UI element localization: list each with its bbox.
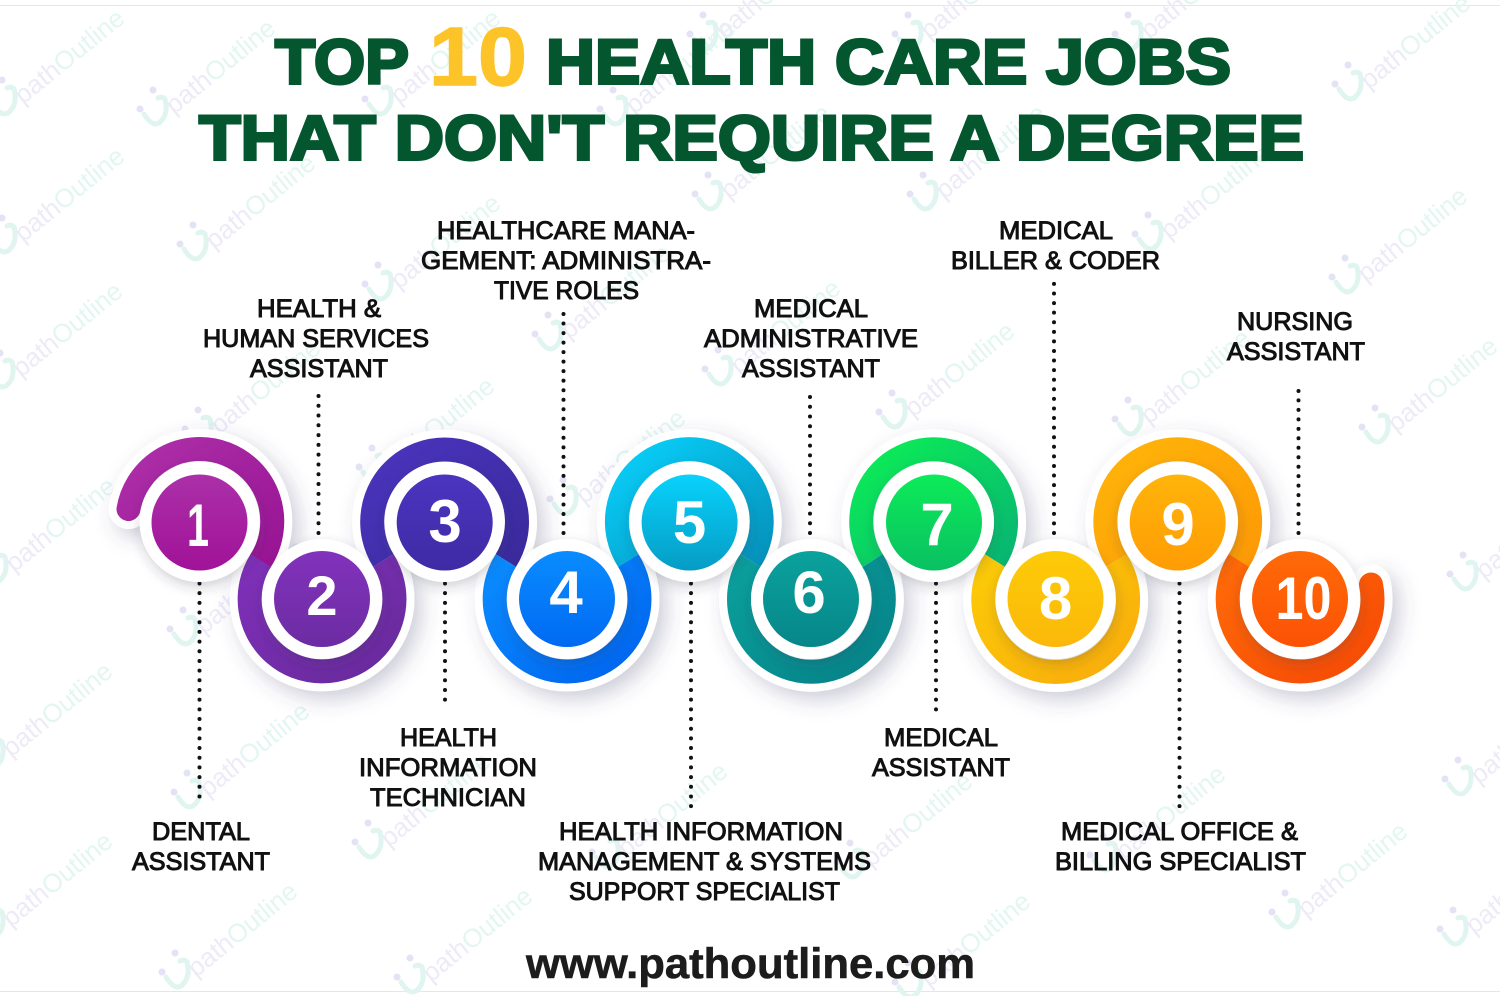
watermarks: pathOutline [374, 746, 496, 853]
badge 2 [262, 539, 382, 659]
watermarks: pathOutline [1109, 759, 1231, 866]
label: medical administrative assistant [704, 295, 918, 383]
label: medical office and billing specialist: MEDICAL OFFICE & [1061, 818, 1298, 846]
badge 10: 10 [1276, 565, 1332, 632]
badge 8 [996, 539, 1116, 659]
label: medical office and billing specialist: BILLING SPECIALIST [1055, 848, 1306, 876]
watermarks: pathOutline [181, 876, 303, 983]
coloured ribbon bands [128, 449, 1372, 672]
watermarks: pathOutline [914, 886, 1036, 993]
band 1 [128, 449, 272, 560]
badge 5 [630, 462, 750, 582]
watermarks: pathOutline [856, 766, 978, 873]
title line 2: THAT DON'T REQUIRE A DEGREE [199, 104, 1304, 174]
watermarks: pathOutline [569, 403, 691, 510]
label: healthcare management administrative roles [421, 217, 711, 305]
label: health information technician [359, 724, 537, 812]
watermarks: pathOutline [384, 3, 506, 110]
watermarks: pathOutline [8, 3, 130, 110]
label: dental assistant: DENTAL [152, 818, 250, 846]
watermarks: pathOutline [1154, 138, 1276, 245]
band 4 [495, 560, 639, 672]
badge 1: 1 [187, 492, 209, 559]
label: medical administrative assistant: MEDICAL [754, 295, 868, 323]
label: nursing assistant [1227, 308, 1365, 366]
watermarks: pathOutline [193, 696, 315, 803]
badge 8: 8 [1039, 565, 1072, 632]
watermarks: pathOutline [1134, 323, 1256, 430]
label: medical biller and coder: MEDICAL [999, 217, 1113, 245]
watermarks: pathOutline [611, 756, 733, 863]
badge 6: 6 [792, 559, 826, 626]
watermarks: pathOutline [898, 316, 1020, 423]
label: health information technician: INFORMATION [359, 754, 537, 782]
label: health and human services assistant: HEALTH & [257, 295, 381, 323]
label: health information technician: HEALTH [400, 724, 497, 752]
watermarks: pathOutline [714, 98, 836, 205]
watermarks: pathOutline [1351, 181, 1473, 288]
watermarks: pathOutline [378, 371, 500, 478]
badge 10 [1240, 539, 1360, 659]
badge 7: 7 [920, 491, 954, 558]
watermarks: pathOutline [0, 471, 121, 578]
watermarks: pathOutline [199, 148, 321, 255]
label: medical assistant [872, 724, 1010, 782]
label: health and human services assistant [203, 295, 429, 383]
band 8 [983, 560, 1128, 672]
watermarks: pathOutline [204, 333, 326, 440]
title [199, 10, 1304, 174]
label: dental assistant: ASSISTANT [132, 848, 270, 876]
band 3 [372, 449, 517, 560]
watermarks: pathOutline [384, 188, 506, 295]
watermarks: pathOutline [1291, 816, 1413, 923]
band 10 [1228, 560, 1372, 672]
badge 6 [751, 539, 871, 659]
watermarks: pathOutline [554, 238, 676, 345]
label: nursing assistant: NURSING [1237, 308, 1353, 336]
label: health information technician: TECHNICIAN [370, 784, 526, 812]
watermarks: pathOutline [724, 273, 846, 380]
watermarks: pathOutline [619, 13, 741, 120]
badge 3 [385, 462, 505, 582]
label: health and human services assistant: HUMAN SERVICES [203, 325, 429, 353]
band 6 [739, 560, 884, 672]
watermarks: pathOutline [8, 141, 130, 248]
label: health and human services assistant: ASSISTANT [250, 355, 388, 383]
title line 1: HEALTH CARE JOBS [546, 28, 1231, 98]
label: health information management and systems support specialist [538, 818, 871, 906]
number badges [140, 462, 1360, 659]
watermarks: pathOutline [189, 533, 311, 640]
badge 5: 5 [673, 489, 706, 556]
band 7 [861, 449, 1006, 560]
label: healthcare management administrative roles: HEALTHCARE MANA- [437, 217, 695, 245]
label: medical biller and coder: BILLER & CODER [951, 247, 1160, 275]
badge 9: 9 [1161, 491, 1195, 558]
label: healthcare management administrative roles: GEMENT: ADMINISTRA- [421, 247, 711, 275]
band 5 [617, 449, 762, 560]
label: medical administrative assistant: ASSISTANT [742, 355, 880, 383]
label: dental assistant [132, 818, 270, 876]
label: health information management and systems support specialist: MANAGEMENT & SYSTEMS [538, 848, 871, 876]
watermarks: pathOutline [929, 98, 1051, 205]
badge 4 [507, 539, 627, 659]
label: health information management and systems support specialist: SUPPORT SPECIALIST [569, 878, 840, 906]
watermarks: pathOutline [159, 13, 281, 120]
label: medical biller and coder [951, 217, 1160, 275]
badge 1 [140, 462, 260, 582]
label: health information management and systems support specialist: HEALTH INFORMATION [559, 818, 843, 846]
badge 3: 3 [428, 488, 462, 555]
watermarks: pathOutline [6, 276, 128, 383]
title line 1: 10 [429, 10, 527, 103]
wavy ribbon white outline with shadow [128, 449, 1372, 672]
badge 2: 2 [306, 564, 338, 627]
badge 9 [1118, 462, 1238, 582]
watermarks: pathOutline [1381, 331, 1500, 438]
title line 1: TOP [275, 28, 409, 98]
badge 4: 4 [549, 559, 583, 626]
label: medical administrative assistant: ADMINISTRATIVE [704, 325, 918, 353]
band 9 [1105, 449, 1250, 560]
band 2 [250, 560, 394, 671]
title line 1 [275, 10, 1231, 103]
label: medical office and billing specialist [1055, 818, 1306, 876]
watermarks: pathOutline [416, 881, 538, 988]
label: nursing assistant: ASSISTANT [1227, 338, 1365, 366]
website url: www.pathoutline.com [525, 940, 975, 988]
label: healthcare management administrative roles: TIVE ROLES [494, 277, 639, 305]
dotted leader lines [200, 283, 1298, 807]
label: medical assistant: ASSISTANT [872, 754, 1010, 782]
badge 7 [874, 462, 994, 582]
label: medical assistant: MEDICAL [884, 724, 998, 752]
